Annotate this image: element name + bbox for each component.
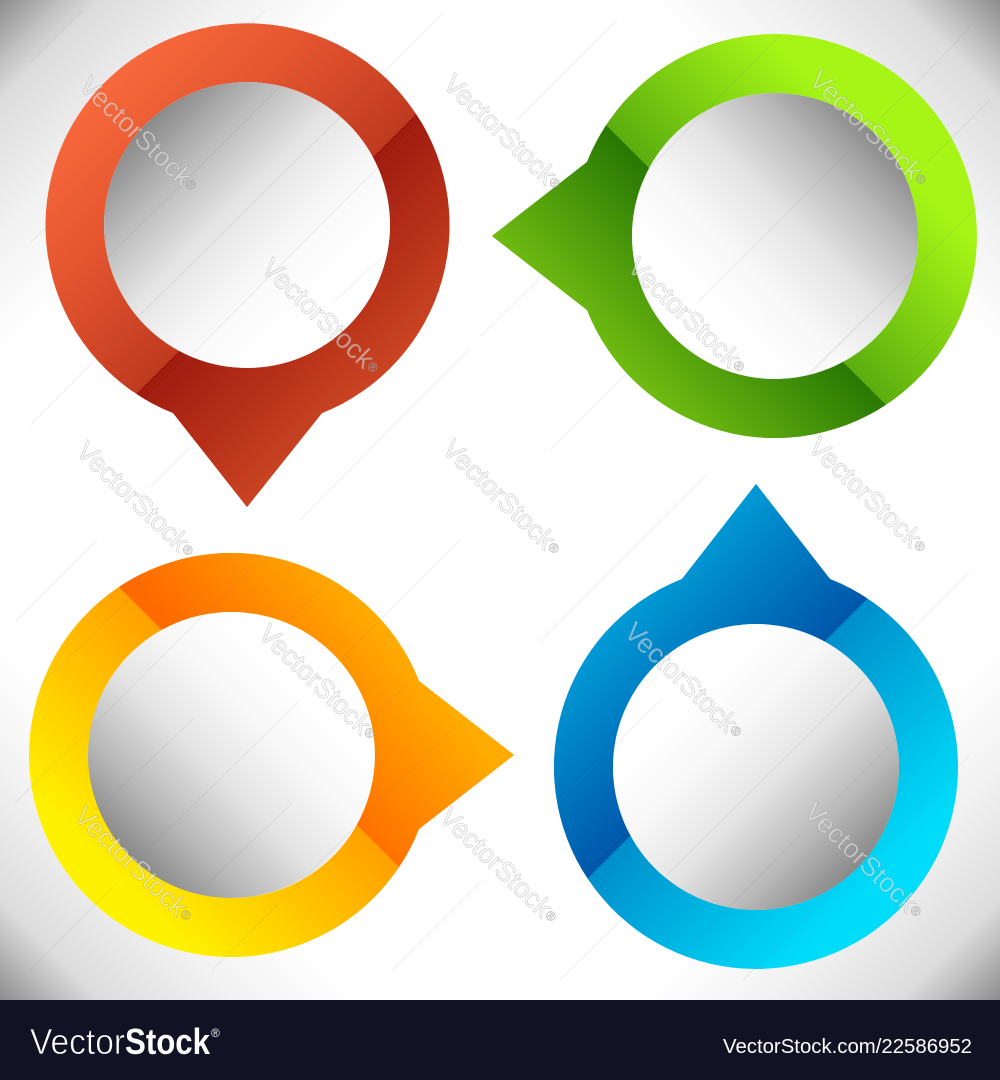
green ring dark half with pointer	[492, 125, 886, 438]
green ring light half	[492, 34, 977, 438]
blue ring dark half with pointer	[554, 484, 868, 878]
panel: red pin pointing down	[45, 23, 449, 507]
panel: green pin pointing left	[492, 34, 977, 438]
orange pin inner disc	[88, 612, 374, 898]
watermarks: VectorStock®	[804, 64, 935, 193]
footer bar	[0, 1000, 1000, 1080]
panel: orange pin pointing right	[29, 553, 514, 957]
watermarks: VectorStock®	[434, 801, 565, 930]
footer bar: ®	[211, 1026, 220, 1040]
blue pin inner disc	[613, 624, 899, 910]
green pin inner disc	[632, 93, 918, 379]
watermarks: VectorStock®	[437, 433, 568, 562]
watermarks: VectorStock®	[803, 431, 934, 560]
watermarks	[69, 64, 935, 930]
watermarks: VectorStock®	[256, 252, 387, 381]
watermarks: VectorStock®	[69, 800, 200, 929]
footer bar: Stock	[125, 1021, 211, 1062]
red ring dark half with pointer	[136, 114, 450, 507]
watermarks: VectorStock®	[799, 796, 930, 925]
watermarks: VectorStock®	[622, 251, 753, 380]
orange ring light half	[29, 553, 514, 957]
red pin inner disc	[104, 82, 390, 368]
watermarks: VectorStock®	[253, 618, 384, 747]
watermarks: VectorStock®	[619, 616, 750, 745]
panel: blue pin pointing up	[554, 484, 958, 969]
footer logo: Vector	[30, 1021, 125, 1062]
footer image id: VectorStock.com/22586952	[723, 1036, 972, 1058]
orange ring dark half with pointer	[119, 553, 514, 867]
red ring light half	[45, 23, 449, 507]
watermarks: VectorStock®	[71, 435, 202, 564]
watermarks: VectorStock®	[74, 70, 205, 199]
watermarks: VectorStock®	[438, 68, 569, 197]
blue ring light half	[554, 484, 958, 969]
